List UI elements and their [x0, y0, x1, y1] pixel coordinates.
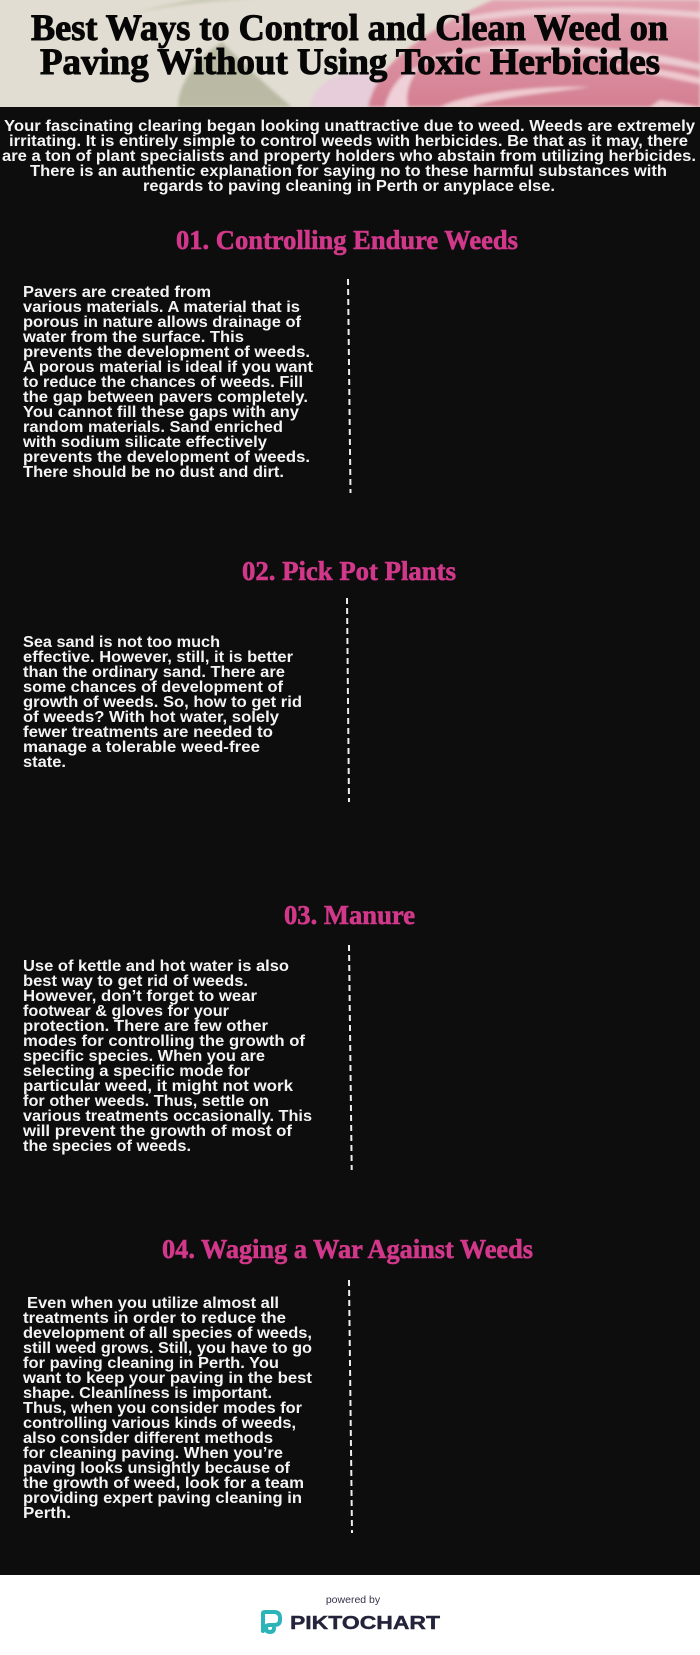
intro paragraph: regards to paving cleaning in Perth or anyplace else. [143, 178, 555, 195]
text block: section 04: development of all species of weeds, [23, 1325, 312, 1342]
header banner: painted floral background [0, 0, 700, 107]
text block: section 03: various treatments occasionally. This [23, 1108, 312, 1125]
title: Paving Without Using Toxic Herbicides [40, 42, 660, 83]
text block: section 01: random materials. Sand enriched [23, 419, 283, 436]
text block: section 02 [23, 634, 302, 771]
text block: section 01 [22, 284, 313, 481]
text block: section 03: best way to get rid of weeds. [23, 973, 248, 990]
intro paragraph [2, 118, 696, 195]
intro paragraph: Your fascinating clearing began looking unattractive due to weed. Weeds are extremely [4, 118, 695, 135]
powered by label: powered by [326, 1594, 381, 1606]
dashed divider: section 03 [349, 945, 352, 1170]
dashed divider: section 04 [349, 1280, 352, 1533]
title [31, 8, 668, 83]
text block: section 04: the growth of weed, look for a team [23, 1475, 304, 1492]
text block: section 02: Sea sand is not too much [23, 634, 220, 651]
text block: section 02: growth of weeds. So, how to get rid [23, 694, 302, 711]
text block: section 03: footwear & gloves for your [23, 1003, 229, 1020]
intro paragraph: are a ton of plant specialists and property holders who abstain from utilizing herbicides. [2, 148, 696, 165]
text block: section 04: Even when you utilize almost all [27, 1295, 279, 1312]
text block: section 02: of weeds? With hot water, solely [23, 709, 279, 726]
text block: section 01: Pavers are created from [23, 284, 211, 301]
title: Best Ways to Control and Clean Weed on [31, 8, 668, 49]
text block: section 02: fewer treatments are needed to [23, 724, 273, 741]
text block: section 01: There should be no dust and dirt. [23, 464, 284, 481]
text block: section 04: for paving cleaning in Perth. You [23, 1355, 279, 1372]
text block: section 04: still weed grows. Still, you have to go [23, 1340, 312, 1357]
footer: Piktochart branding [0, 1575, 700, 1655]
text block: section 01: the gap between pavers completely. [23, 389, 308, 406]
text block: section 01: various materials. A material that is [23, 299, 300, 316]
heading: 01 Controlling Endure Weeds: 01. Controlling Endure Weeds [176, 225, 518, 255]
text block: section 03: Use of kettle and hot water is also [23, 958, 289, 975]
text block: section 01: to reduce the chances of weeds. Fill [23, 374, 303, 391]
text block: section 01: You cannot fill these gaps with any [23, 404, 299, 421]
text block: section 04: for cleaning paving. When you’re [23, 1445, 283, 1462]
text block: section 02: manage a tolerable weed-free [23, 739, 260, 756]
text block: section 01: prevents the development of weeds. [23, 344, 310, 361]
wordmark: PIKTOCHART [290, 1613, 440, 1633]
text block: section 04: Perth. [23, 1505, 71, 1522]
text block: section 02: than the ordinary sand. There are [23, 664, 285, 681]
text block: section 04: shape. Cleanliness is important. [23, 1385, 272, 1402]
heading: 04 Waging a War Against Weeds: 04. Waging a War Against Weeds [162, 1234, 533, 1264]
dashed divider: section 02 [347, 598, 349, 802]
text block: section 04: controlling various kinds of weeds, [23, 1415, 296, 1432]
text block: section 03: modes for controlling the growth of [23, 1033, 306, 1050]
text block: section 04: also consider different methods [23, 1430, 273, 1447]
dashed divider: section 01 [348, 279, 350, 493]
text block: section 03: protection. There are few other [23, 1018, 268, 1035]
text block: section 04: treatments in order to reduce the [23, 1310, 286, 1327]
text block: section 03: selecting a specific mode for [23, 1063, 250, 1080]
text block: section 02: state. [23, 754, 66, 771]
text block: section 03: However, don’t forget to wear [23, 988, 257, 1005]
text block: section 02: effective. However, still, it is better [23, 649, 293, 666]
heading: 03 Manure: 03. Manure [284, 900, 415, 930]
text block: section 03: will prevent the growth of most of [22, 1123, 293, 1140]
text block: section 03: particular weed, it might not work [23, 1078, 293, 1095]
text block: section 01: with sodium silicate effectively [22, 434, 267, 451]
text block: section 03 [22, 958, 312, 1155]
text block: section 01: A porous material is ideal if you want [23, 359, 313, 376]
intro paragraph: irritating. It is entirely simple to control weeds with herbicides. Be that as it may, there [9, 133, 688, 150]
text block: section 04: Thus, when you consider modes for [23, 1400, 302, 1417]
text block: section 01: porous in nature allows drainage of [23, 314, 302, 331]
text block: section 04 [22, 1295, 312, 1522]
heading: 02 Pick Pot Plants: 02. Pick Pot Plants [242, 556, 456, 586]
text block: section 04: providing expert paving cleaning in [23, 1490, 302, 1507]
text block: section 02: some chances of development of [23, 679, 284, 696]
text block: section 03: for other weeds. Thus, settle on [23, 1093, 269, 1110]
text block: section 04: paving looks unsightly because of [23, 1460, 291, 1477]
icon: Piktochart P logo [263, 1612, 280, 1632]
text block: section 04: want to keep your paving in the best [22, 1370, 312, 1387]
text block: section 01: water from the surface. This [22, 329, 244, 346]
text block: section 03: specific species. When you are [23, 1048, 265, 1065]
text block: section 01: prevents the development of weeds. [23, 449, 310, 466]
intro paragraph: There is an authentic explanation for saying no to these harmful substances with [30, 163, 667, 180]
text block: section 03: the species of weeds. [23, 1138, 191, 1155]
